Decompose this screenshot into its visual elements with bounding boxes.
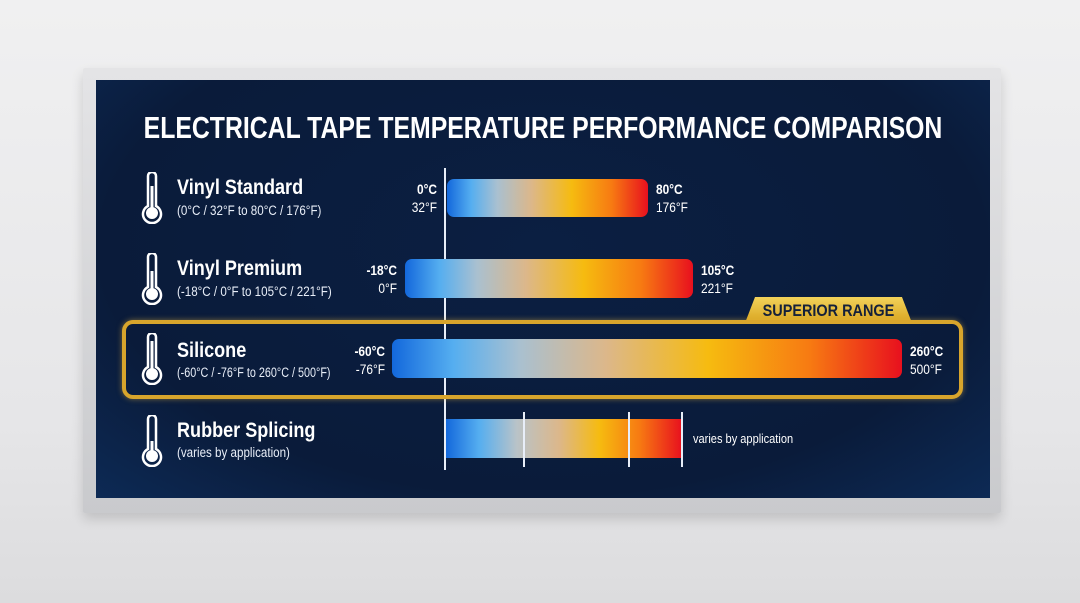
label: Silicone: [177, 339, 246, 362]
icon: thermometer: [142, 253, 162, 305]
icon: thermometer: [142, 415, 162, 467]
bar: vinyl premium: [366, 259, 734, 298]
axis line: [444, 168, 446, 470]
tab: superior range: [746, 297, 911, 320]
icon: thermometer: [142, 333, 162, 385]
bar: vinyl premium: 105°C: [701, 262, 734, 278]
bar: vinyl standard: 0°C: [417, 181, 437, 197]
tab: superior range: SUPERIOR RANGE: [763, 301, 894, 320]
navy panel: [96, 80, 990, 498]
sign frame: [83, 68, 1001, 513]
bar: rubber splicing: varies by application: [693, 431, 793, 446]
row: vinyl premium: (-18°C / 0°F to 105°C / 221°F): [177, 284, 332, 299]
bar: vinyl standard: 80°C: [656, 181, 683, 197]
panel: silicone highlight: 500°F: [910, 361, 942, 377]
panel: silicone highlight: 260°C: [910, 343, 943, 359]
bar: vinyl standard: 32°F: [412, 199, 437, 215]
panel: silicone highlight: [118, 297, 967, 403]
label: Rubber Splicing: [177, 419, 315, 442]
title: ELECTRICAL TAPE TEMPERATURE PERFORMANCE COMPARISON: [144, 110, 942, 145]
panel: silicone highlight: -60°C: [354, 343, 385, 359]
row: vinyl standard: [142, 172, 321, 224]
label: Vinyl Premium: [177, 257, 302, 280]
row: vinyl standard: (0°C / 32°F to 80°C / 176°F): [177, 203, 321, 218]
panel: silicone highlight: (-60°C / -76°F to 260°C / 500°F): [177, 365, 331, 380]
label: Vinyl Standard: [177, 176, 303, 199]
panel: silicone highlight: -76°F: [356, 361, 385, 377]
icon: thermometer: [142, 172, 162, 224]
row: rubber splicing: (varies by application): [177, 445, 290, 460]
bar: vinyl premium: 221°F: [701, 280, 733, 296]
bar: vinyl premium: -18°C: [366, 262, 397, 278]
row: vinyl premium: [142, 253, 332, 305]
bar: vinyl premium: 0°F: [378, 280, 397, 296]
bar: vinyl standard: [412, 179, 688, 217]
bar: vinyl standard: 176°F: [656, 199, 688, 215]
row: rubber splicing: [142, 415, 315, 467]
bar: silicone: [392, 339, 902, 378]
bar: rubber splicing: [446, 412, 793, 467]
